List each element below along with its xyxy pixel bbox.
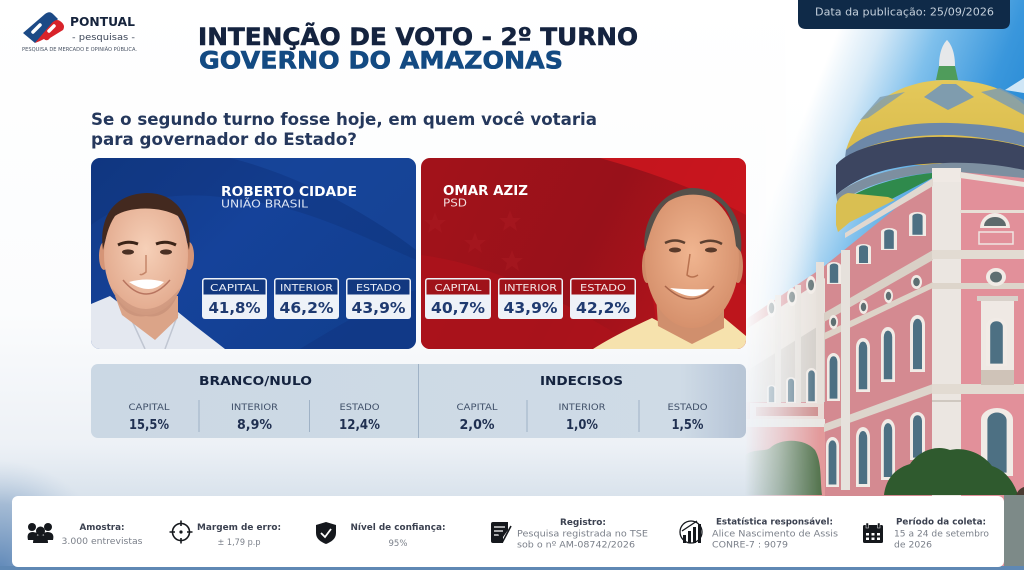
photo: Teatro Amazonas building with sky: [745, 0, 1024, 570]
logo: Pontual Pesquisas: [22, 12, 137, 53]
stat: estado: [570, 278, 636, 319]
confidence level: 95%: [388, 539, 408, 549]
right bay windows: [977, 213, 1018, 476]
indecisos estado: [668, 403, 708, 433]
stat: capital: [425, 278, 491, 319]
branco/nulo interior: 8,9%: [237, 418, 272, 433]
candidate name: [443, 184, 528, 210]
indecisos capital: CAPITAL: [456, 403, 498, 413]
logo: Pontual Pesquisas: PONTUAL: [70, 15, 135, 29]
statistician: [712, 518, 839, 550]
stat: interior: [274, 278, 339, 319]
publication date tag: [798, 0, 1010, 29]
indecisos interior: 1,0%: [566, 418, 598, 433]
heading: indecisos: INDECISOS: [540, 373, 623, 388]
statistician: Alice Nascimento de Assis: [712, 530, 839, 540]
sample size: 3.000 entrevistas: [62, 537, 143, 547]
stat: capital: [202, 278, 267, 319]
bottom edge strip: [0, 566, 1024, 570]
stat: estado: 43,9%: [352, 299, 406, 317]
confidence level: [350, 523, 446, 549]
stat: estado: ESTADO: [580, 283, 626, 294]
sample size: [62, 523, 143, 547]
registration: [517, 518, 648, 550]
panel: Roberto Cidade: [91, 158, 416, 349]
sample size: Amostra:: [80, 523, 124, 533]
indecisos estado: ESTADO: [668, 403, 708, 413]
branco/nulo capital: [128, 403, 170, 433]
survey question: Se o segundo turno fosse hoje, em quem você votaria: [91, 110, 597, 129]
logo mark: [23, 12, 64, 43]
collection period: de 2026: [894, 540, 932, 550]
title: [198, 22, 638, 74]
icon: statistics chart: [680, 521, 702, 543]
icon: crosshair: [170, 520, 192, 544]
candidate name: PSD: [443, 196, 467, 210]
stat: capital: 40,7%: [431, 299, 485, 317]
indecisos capital: 2,0%: [460, 418, 494, 433]
stat: interior: INTERIOR: [504, 283, 557, 294]
statistician: CONRE-7 : 9079: [712, 540, 788, 550]
portrait: Roberto Cidade: [91, 193, 225, 349]
candidate name: OMAR AZIZ: [443, 184, 528, 199]
logo: Pontual Pesquisas: - pesquisas -: [72, 33, 135, 43]
icon: registered document: [491, 522, 511, 543]
stat: estado: [346, 278, 411, 319]
branco/nulo interior: [231, 403, 278, 433]
branco/nulo estado: [339, 403, 380, 433]
indecisos estado: 1,5%: [672, 418, 704, 433]
stat: capital: 41,8%: [208, 299, 261, 317]
indecisos capital: [456, 403, 498, 433]
collection period: 15 a 24 de setembro: [894, 530, 989, 540]
building: [745, 168, 1024, 570]
fade over left of building: [745, 205, 816, 496]
margin of error: Margem de erro:: [197, 523, 281, 533]
panel: blank votes and undecided: [91, 364, 746, 438]
candidate name: UNIÃO BRASIL: [221, 198, 309, 210]
icon: calendar: [863, 523, 883, 543]
branco/nulo capital: CAPITAL: [128, 403, 170, 413]
stat: capital: CAPITAL: [210, 283, 260, 294]
registration: Registro:: [560, 518, 606, 528]
statistician: Estatística responsável:: [716, 518, 833, 528]
registration: sob o nº AM-08742/2026: [517, 540, 635, 550]
icon: people: [28, 523, 53, 543]
branco/nulo capital: 15,5%: [129, 418, 169, 433]
collection period: [894, 518, 989, 550]
title: GOVERNO DO AMAZONAS: [199, 46, 563, 74]
stat: capital: CAPITAL: [434, 283, 482, 294]
confidence level: Nível de confiança:: [350, 523, 446, 533]
panel: Omar Aziz: [421, 158, 746, 349]
margin of error: [197, 523, 281, 548]
branco/nulo estado: 12,4%: [339, 418, 380, 433]
logo: Pontual Pesquisas: PESQUISA DE MERCADO E OPINIÃO PÚBLICA.: [22, 46, 137, 53]
publication date tag: Data da publicação: 25/09/2026: [815, 6, 994, 18]
dome: [836, 80, 1024, 232]
side wall windows: [767, 212, 926, 487]
heading: branco/nulo: BRANCO/NULO: [199, 373, 312, 388]
trees: [745, 441, 1024, 566]
branco/nulo estado: ESTADO: [340, 403, 380, 413]
registration: Pesquisa registrada no TSE: [517, 530, 648, 540]
stat: estado: 42,2%: [576, 299, 630, 317]
stat: estado: ESTADO: [356, 283, 401, 294]
panel: methodology footer: [12, 496, 1004, 567]
margin of error: ± 1,79 p.p: [218, 538, 260, 548]
collection period: Período da coleta:: [896, 518, 986, 528]
survey question: [91, 110, 597, 149]
icon: shield: [316, 522, 336, 544]
dome finial: [936, 40, 958, 80]
stat: interior: [498, 278, 563, 319]
stat: interior: 43,9%: [504, 299, 558, 317]
candidate name: ROBERTO CIDADE: [221, 185, 357, 200]
branco/nulo interior: INTERIOR: [231, 403, 278, 413]
title: INTENÇÃO DE VOTO - 2º TURNO: [198, 22, 638, 51]
indecisos interior: INTERIOR: [558, 403, 606, 413]
stat: interior: INTERIOR: [280, 283, 333, 294]
candidate name: [221, 185, 357, 210]
survey question: para governador do Estado?: [91, 130, 357, 149]
indecisos interior: [558, 403, 606, 433]
stat: interior: 46,2%: [280, 299, 334, 317]
portrait: Omar Aziz: [593, 188, 746, 349]
